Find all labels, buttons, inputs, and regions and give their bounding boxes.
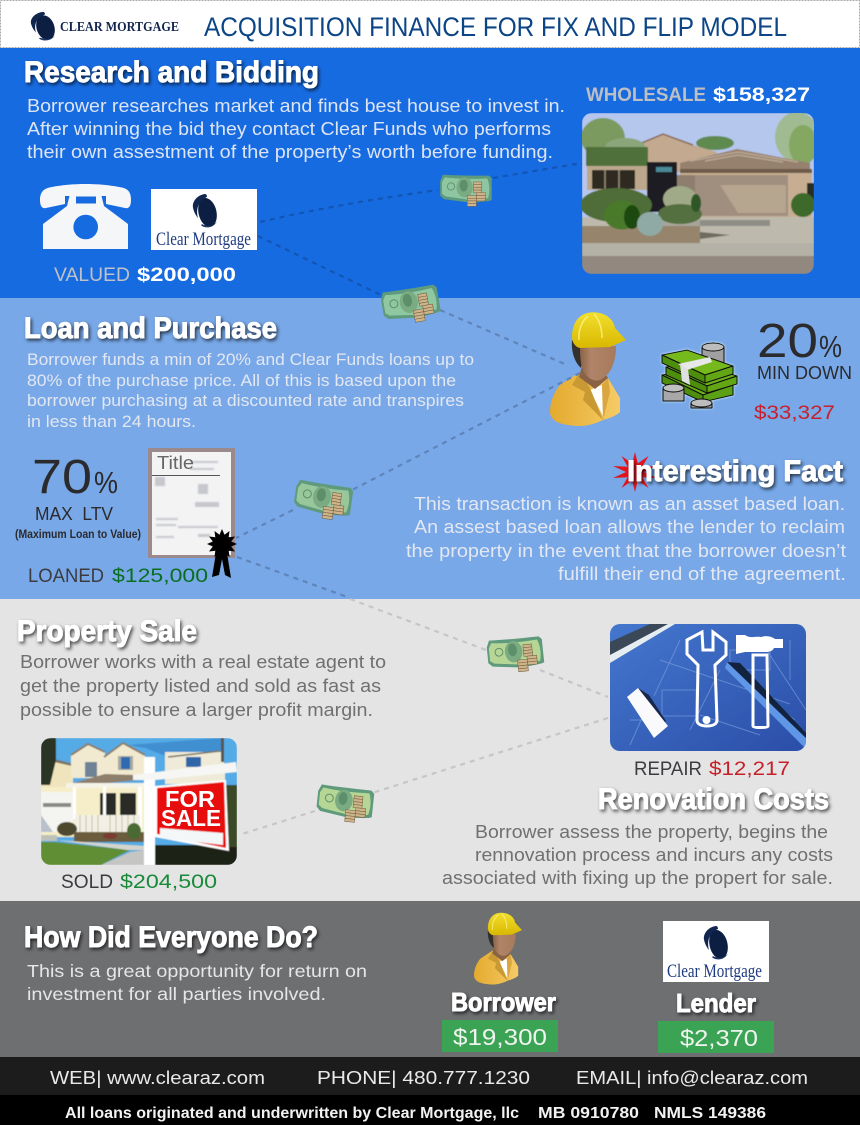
contact bar: EMAIL| info@clearaz.com: [576, 1067, 808, 1088]
icon: cash stack: [662, 343, 737, 408]
text block: After winning the bid they contact Clear Funds who performs: [27, 118, 551, 139]
lender label: Lender: [676, 988, 756, 1018]
icon: money 4: [486, 635, 545, 675]
icon: borrower worker: [550, 312, 626, 426]
contact bar: PHONE| 480.777.1230: [317, 1067, 530, 1088]
borrower label: Borrower: [451, 987, 556, 1017]
lender amount: [658, 1021, 774, 1053]
arrow: repair to sale: [242, 718, 608, 834]
text block: property sale: possible to ensure a larger profit margin.: [20, 699, 373, 720]
text block: property sale: Borrower works with a real estate agent to: [20, 651, 386, 672]
icon: money 1: [440, 175, 492, 206]
repair amount: REPAIR: [634, 759, 702, 780]
min down stat: $33,327: [754, 403, 835, 424]
wholesale label: WHOLESALE: [586, 85, 706, 106]
contact bar: WEB| www.clearaz.com: [50, 1067, 265, 1088]
icon: clear mortgage logo: Clear Mortgage: [156, 229, 251, 250]
photo: for sale house: [41, 738, 237, 865]
heading: How Did Everyone Do?: [24, 921, 318, 954]
max ltv stat: (Maximum Loan to Value): [15, 529, 141, 541]
text block: borrower purchasing at a discounted rate and transpires: [27, 391, 464, 410]
panel: how did everyone do: [0, 901, 860, 1057]
text block: renovation costs: rennovation process and incurs any costs: [475, 844, 833, 865]
panel: sale and renovation: [0, 599, 860, 901]
contact bar: [0, 1057, 860, 1095]
icon: money 2: [380, 283, 442, 328]
sold amount: $204,500: [120, 872, 217, 893]
arrow: title to repair: [237, 557, 608, 697]
text block: interesting fact: the property in the event that the borrower doesn’t: [406, 540, 846, 561]
icon: clear mortgage logo: [151, 189, 257, 250]
text block: property sale: [20, 651, 386, 720]
icon: money 3: [292, 479, 354, 522]
valued label: VALUED: [54, 265, 130, 286]
photo: for sale house: SALE: [161, 805, 221, 831]
max ltv stat: [15, 451, 141, 541]
text block: [27, 350, 474, 431]
borrower amount: $19,300: [453, 1024, 547, 1050]
valued amount: $200,000: [137, 265, 236, 286]
icon: telephone: [40, 184, 131, 249]
legal footer: [0, 1095, 860, 1125]
repair amount: [634, 759, 790, 780]
arrow: logo to borrower: [258, 236, 567, 365]
min down stat: [754, 315, 852, 424]
text block: interesting fact: fulfill their end of the agreement.: [558, 563, 846, 584]
icon: header logo: [31, 12, 179, 41]
text block: renovation costs: Borrower assess the property, begins the: [475, 821, 828, 842]
photo: for sale house: FOR: [165, 786, 215, 812]
text block: Borrower funds a min of 20% and Clear Funds loans up to: [27, 350, 474, 369]
icon: title document: [148, 448, 235, 558]
loaned amount: [28, 566, 208, 587]
heading: Research and Bidding: [24, 56, 319, 89]
loaned amount: LOANED: [28, 566, 104, 587]
text block: property sale: get the property listed and sold as fast as: [20, 675, 381, 696]
max ltv stat: MAX LTV: [35, 504, 113, 524]
icon: red burst: [613, 452, 657, 492]
text block: renovation costs: [442, 821, 833, 888]
max ltv stat: 70: [32, 451, 92, 504]
photo: wholesale house: [580, 112, 819, 274]
legal footer: All loans originated and underwritten by Clear Mortgage, llc: [65, 1105, 519, 1122]
text block: interesting fact: An assest based loan allows the lender to reclaim: [414, 516, 845, 537]
heading: Loan and Purchase: [24, 312, 277, 345]
max ltv stat: %: [94, 465, 118, 500]
text block: 80% of the purchase price. All of this is based upon the: [27, 371, 456, 390]
icon: header logo: CLEAR MORTGAGE: [60, 19, 179, 34]
heading: property sale: Property Sale: [17, 615, 197, 648]
min down stat: MIN DOWN: [757, 362, 852, 383]
icon: seal ribbon: [207, 529, 237, 578]
repair amount: $12,217: [709, 759, 790, 780]
panel: loan and purchase: [0, 298, 860, 599]
text block: investment for all parties involved.: [27, 984, 326, 1004]
title: ACQUISITION FINANCE FOR FIX AND FLIP MODEL: [204, 12, 787, 42]
arrow: borrower to title: [236, 373, 580, 538]
icon: lender logo: [663, 921, 769, 982]
wholesale amount: $158,327: [713, 85, 810, 106]
header bar: [0, 0, 860, 48]
legal footer: NMLS 149386: [654, 1105, 766, 1122]
text block: interesting fact: This transaction is known as an asset based loan.: [414, 493, 845, 514]
text block: in less than 24 hours.: [27, 412, 196, 431]
legal footer: MB 0910780: [538, 1105, 639, 1122]
borrower amount: [442, 1020, 558, 1052]
icon: lender logo: Clear Mortgage: [667, 961, 762, 982]
icon: title document: Title: [157, 453, 194, 473]
sold amount: [61, 872, 217, 893]
text block: [27, 961, 367, 1004]
min down stat: 20: [757, 315, 818, 368]
text block: interesting fact: [406, 493, 846, 584]
text block: renovation costs: associated with fixing up the propert for sale.: [442, 867, 833, 888]
panel: research and bidding: [0, 48, 860, 298]
text block: [27, 95, 565, 162]
arrow: logo to wholesale house: [260, 163, 582, 222]
heading: interesting fact: Interesting Fact: [627, 455, 843, 488]
icon: borrower: [474, 913, 522, 984]
min down stat: %: [819, 329, 842, 364]
text block: This is a great opportunity for return on: [27, 961, 367, 981]
text block: their own assestment of the property’s worth before funding.: [27, 141, 553, 162]
sold amount: SOLD: [61, 872, 113, 893]
heading: renovation costs: Renovation Costs: [598, 783, 829, 816]
image: blueprint with tools: [610, 624, 806, 751]
loaned amount: $125,000: [112, 566, 208, 587]
text block: Borrower researches market and finds best house to invest in.: [27, 95, 565, 116]
lender amount: $2,370: [680, 1025, 758, 1051]
icon: money 5: [315, 784, 375, 824]
